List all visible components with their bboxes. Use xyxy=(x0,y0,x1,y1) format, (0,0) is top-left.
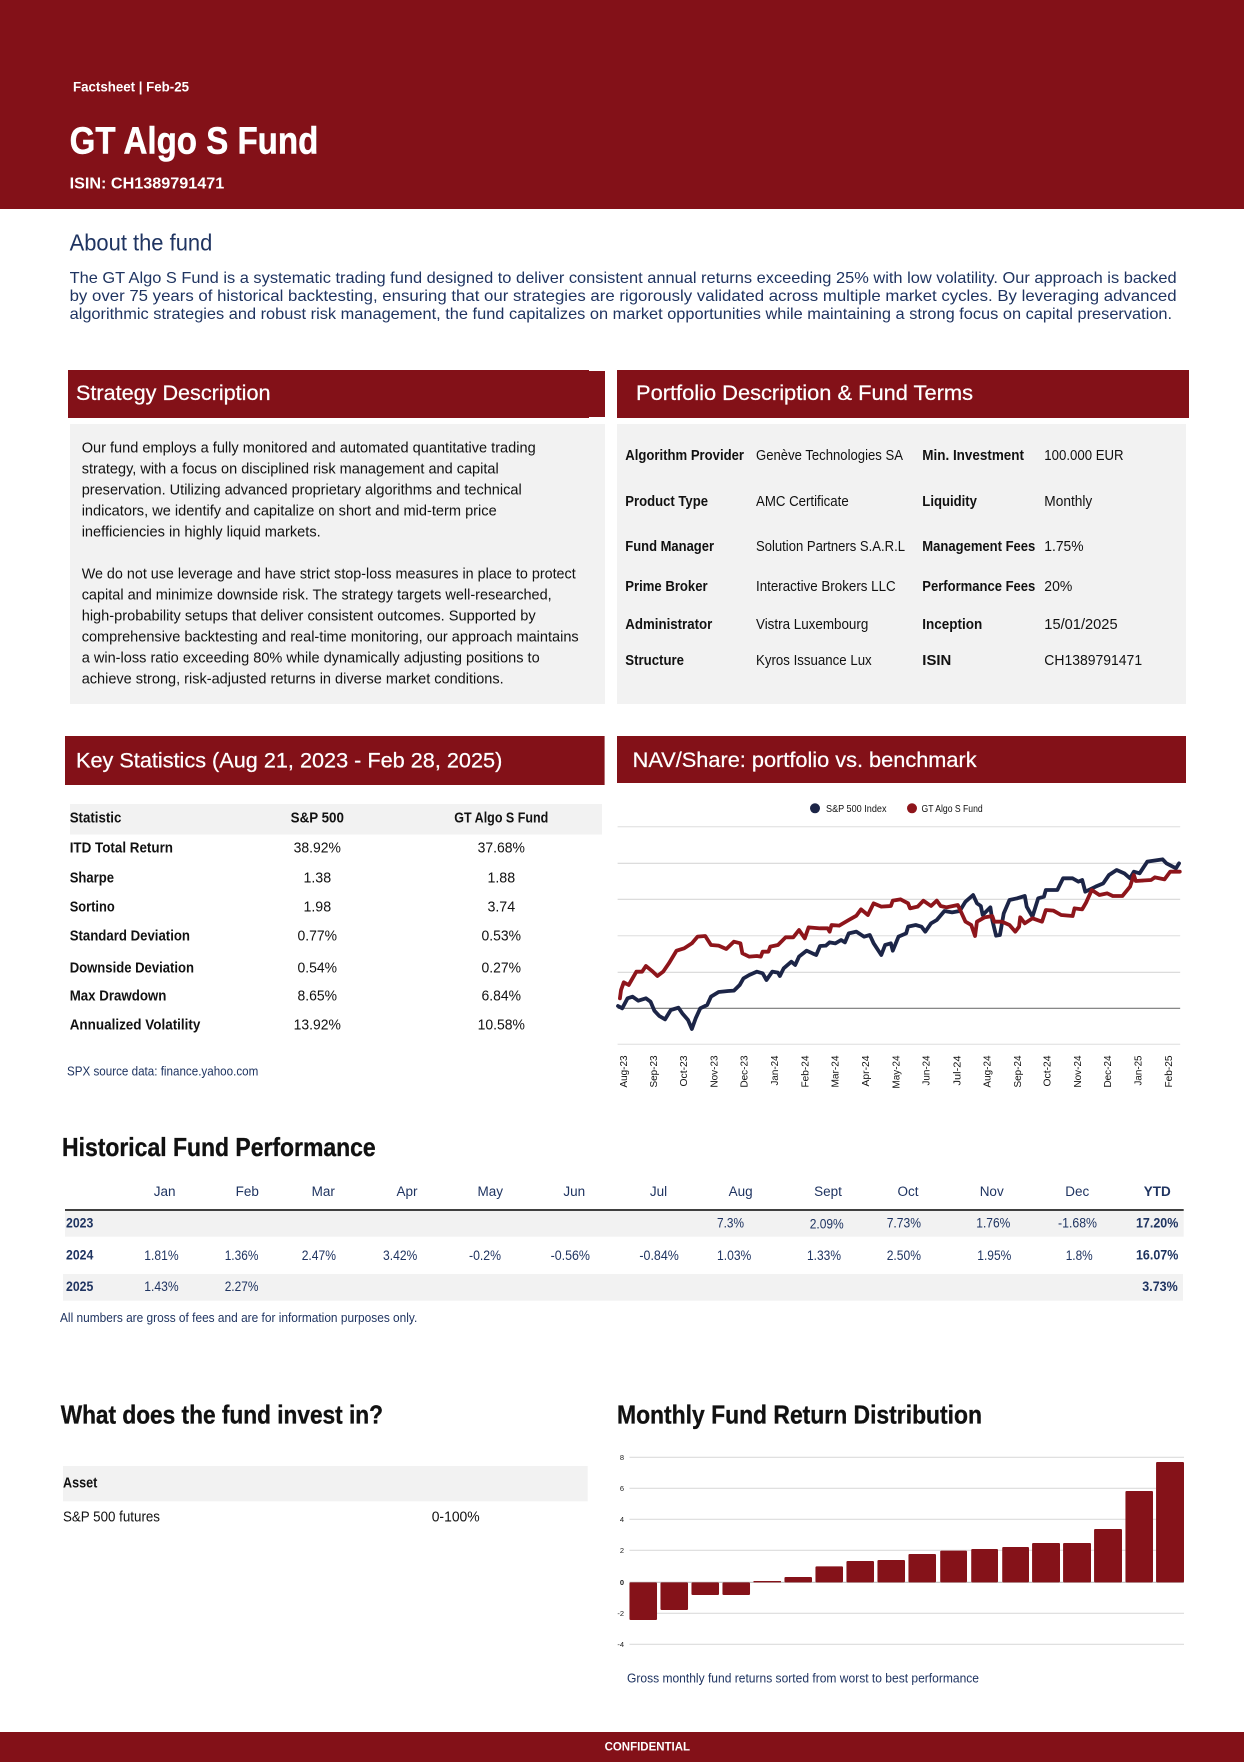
performance table: 1.36% xyxy=(225,1248,258,1263)
fund terms table: Interactive Brokers LLC xyxy=(756,579,896,595)
asset table: 0-100% xyxy=(432,1510,480,1526)
x axis month labels: Oct-23 xyxy=(678,1055,690,1086)
source note: SPX source data: finance.yahoo.com xyxy=(67,1063,258,1078)
panel: strategy description xyxy=(68,370,605,704)
fund terms table: Genève Technologies SA xyxy=(756,448,903,464)
x axis month labels: Oct-24 xyxy=(1042,1055,1054,1086)
performance table: Feb xyxy=(236,1184,259,1199)
x axis month labels: Feb-25 xyxy=(1163,1055,1175,1088)
key statistics table: 37.68% xyxy=(478,841,525,857)
strategy text block: high-probability setups that deliver consistent outcomes. Supported by xyxy=(82,608,536,625)
performance heading: Historical Fund Performance xyxy=(62,1132,376,1162)
x axis month labels: Aug-24 xyxy=(982,1055,994,1088)
key statistics table: ITD Total Return xyxy=(70,841,173,857)
distribution heading: Monthly Fund Return Distribution xyxy=(617,1399,982,1429)
footer bar: CONFIDENTIAL xyxy=(605,1740,690,1754)
fund terms table: CH1389791471 xyxy=(1044,653,1142,669)
x axis month labels: Jul-24 xyxy=(951,1055,963,1086)
key statistics table: 0.53% xyxy=(482,929,521,945)
bar chart xyxy=(629,1457,1184,1644)
strategy text block xyxy=(82,440,579,688)
fund terms table: 1.75% xyxy=(1044,539,1084,555)
y axis labels: 0 xyxy=(620,1578,624,1587)
performance table: -0.84% xyxy=(639,1248,679,1263)
key statistics table: 0.54% xyxy=(298,961,337,977)
performance table: Jul xyxy=(650,1184,667,1199)
fund terms table: Prime Broker xyxy=(625,579,708,595)
x axis month labels xyxy=(618,1055,1175,1088)
performance table: YTD xyxy=(1144,1184,1171,1199)
NAV heading bar xyxy=(617,736,1186,783)
about the fund section xyxy=(70,230,1177,323)
key statistics table: 1.88 xyxy=(487,871,515,887)
y axis labels: 4 xyxy=(620,1515,624,1524)
y axis labels: 6 xyxy=(620,1484,624,1493)
key statistics table: 38.92% xyxy=(294,841,341,857)
y axis labels xyxy=(617,1453,624,1649)
key statistics table: GT Algo S Fund xyxy=(454,811,548,827)
performance table: -0.56% xyxy=(551,1248,590,1263)
strategy text block: inefficiencies in highly liquid markets. xyxy=(82,524,321,541)
about body text xyxy=(70,270,1177,323)
y axis labels: -4 xyxy=(617,1640,624,1649)
line chart xyxy=(618,827,1180,1044)
panel: historical fund performance xyxy=(60,1132,1184,1325)
x axis month labels: Dec-24 xyxy=(1102,1055,1114,1088)
panel: key statistics xyxy=(65,736,605,1078)
key statistics table: 1.38 xyxy=(303,871,331,887)
invest heading: What does the fund invest in? xyxy=(61,1399,383,1429)
performance table: Jun xyxy=(563,1184,585,1199)
performance table: -0.2% xyxy=(469,1248,501,1263)
fund terms table: Vistra Luxembourg xyxy=(756,617,868,633)
asset table xyxy=(63,1476,480,1526)
key statistics table: Max Drawdown xyxy=(70,989,166,1005)
about body text: The GT Algo S Fund is a systematic trading fund designed to deliver consistent annual returns exceeding 25% with low volatility. Our approach is backed xyxy=(70,270,1177,287)
performance table: 1.33% xyxy=(807,1248,841,1263)
performance table xyxy=(66,1184,1178,1294)
about body text: algorithmic strategies and robust risk management, the fund capitalizes on market opportunities while maintaining a strong focus on capital preservation. xyxy=(70,306,1172,323)
performance table: 1.03% xyxy=(717,1248,751,1263)
fund terms table: Fund Manager xyxy=(625,539,714,555)
x axis month labels: May-24 xyxy=(890,1055,902,1088)
key statistics heading bar xyxy=(65,736,605,785)
performance table: 1.8% xyxy=(1066,1248,1093,1263)
fund terms table: Solution Partners S.A.R.L xyxy=(756,539,905,555)
y axis labels: 2 xyxy=(620,1546,624,1555)
strategy heading bar xyxy=(68,370,605,418)
performance table: 1.81% xyxy=(144,1248,179,1263)
GT Algo S Fund line xyxy=(620,872,1180,998)
performance table: Sept xyxy=(814,1184,842,1199)
about heading: About the fund xyxy=(70,230,212,256)
key statistics table xyxy=(70,811,548,1033)
key statistics heading bar: Key Statistics (Aug 21, 2023 - Feb 28, 2025) xyxy=(76,749,502,773)
key statistics table: 1.98 xyxy=(303,900,331,916)
performance footnote: All numbers are gross of fees and are for information purposes only. xyxy=(60,1310,417,1325)
asset table: Asset xyxy=(63,1476,97,1492)
fund terms table: Algorithm Provider xyxy=(625,448,744,464)
strategy text block: achieve strong, risk-adjusted returns in diverse market conditions. xyxy=(82,671,504,688)
strategy text block: strategy, with a focus on disciplined risk management and capital xyxy=(82,461,499,478)
fund terms table: Performance Fees xyxy=(922,579,1035,595)
key statistics table: 3.74 xyxy=(487,900,515,916)
performance table: 2025 xyxy=(66,1279,94,1294)
fund terms table: Liquidity xyxy=(922,494,977,510)
fund terms table: Administrator xyxy=(625,617,713,633)
performance table: -1.68% xyxy=(1058,1215,1097,1230)
fund terms table: Inception xyxy=(922,617,982,633)
portfolio heading bar xyxy=(617,370,1189,418)
strategy text block: a win-loss ratio exceeding 80% while dynamically adjusting positions to xyxy=(82,650,540,667)
x axis month labels: Mar-24 xyxy=(830,1055,842,1088)
strategy text block: comprehensive backtesting and real-time monitoring, our approach maintains xyxy=(82,629,579,646)
x axis month labels: Feb-24 xyxy=(799,1055,811,1088)
performance table: Oct xyxy=(897,1184,919,1199)
fund terms table: 100.000 EUR xyxy=(1044,448,1124,464)
chart legend: S&P 500 Index xyxy=(826,803,887,815)
x axis month labels: Dec-23 xyxy=(738,1055,750,1088)
performance table: 2.27% xyxy=(225,1279,258,1294)
key statistics table: Downside Deviation xyxy=(70,961,194,977)
fund terms table: 15/01/2025 xyxy=(1044,617,1118,633)
title: GT Algo S Fund xyxy=(70,120,318,162)
key statistics table: S&P 500 xyxy=(291,811,344,827)
portfolio heading bar: Portfolio Description & Fund Terms xyxy=(636,381,973,405)
panel: what does the fund invest in xyxy=(61,1399,588,1526)
performance table: 7.3% xyxy=(717,1215,744,1230)
key statistics table: Statistic xyxy=(70,811,121,827)
strategy text block: preservation. Utilizing advanced proprietary algorithms and technical xyxy=(82,482,522,499)
fund terms table: Monthly xyxy=(1044,494,1093,510)
performance table: Apr xyxy=(396,1184,418,1199)
x axis month labels: Aug-23 xyxy=(618,1055,630,1088)
key statistics table: Sortino xyxy=(70,900,115,916)
x axis month labels: Nov-23 xyxy=(708,1055,720,1088)
strategy text block: We do not use leverage and have strict stop-loss measures in place to protect xyxy=(82,566,576,583)
performance table: Dec xyxy=(1065,1184,1090,1199)
key statistics table: 13.92% xyxy=(294,1017,341,1033)
performance table: Mar xyxy=(312,1184,335,1199)
NAV heading bar: NAV/Share: portfolio vs. benchmark xyxy=(633,748,977,772)
chart legend: GT Algo S Fund xyxy=(922,803,983,815)
performance table: 17.20% xyxy=(1136,1215,1178,1230)
key statistics table: Standard Deviation xyxy=(70,929,190,945)
performance table: May xyxy=(478,1184,503,1199)
key statistics table: 0.27% xyxy=(482,961,521,977)
performance table: 3.73% xyxy=(1142,1279,1178,1294)
fund terms table: AMC Certificate xyxy=(756,494,849,510)
performance table: 1.95% xyxy=(977,1248,1011,1263)
key statistics table: 6.84% xyxy=(482,989,521,1005)
S&P 500 line xyxy=(618,859,1179,1029)
performance table: 1.43% xyxy=(144,1279,179,1294)
fund terms table: Product Type xyxy=(625,494,708,510)
performance table: 2024 xyxy=(66,1247,94,1262)
strategy text block: Our fund employs a fully monitored and automated quantitative trading xyxy=(82,440,536,457)
x axis month labels: Apr-24 xyxy=(860,1055,872,1086)
fund terms table xyxy=(625,448,1142,669)
footer bar xyxy=(0,1732,1244,1762)
strategy text block: indicators, we identify and capitalize on short and mid-term price xyxy=(82,503,497,520)
page header banner xyxy=(0,0,1244,209)
fund terms table: Structure xyxy=(625,653,684,669)
performance table: 2.09% xyxy=(810,1216,844,1232)
performance table: 2.47% xyxy=(302,1248,336,1263)
strategy heading bar: Strategy Description xyxy=(76,381,270,405)
x axis month labels: Jan-25 xyxy=(1133,1055,1145,1086)
fund terms table: 20% xyxy=(1044,579,1072,595)
strategy text block: capital and minimize downside risk. The strategy targets well-researched, xyxy=(82,587,552,604)
x axis month labels: Nov-24 xyxy=(1072,1055,1084,1088)
chart legend xyxy=(810,803,983,815)
performance table: Nov xyxy=(980,1184,1004,1199)
x axis month labels: Sep-24 xyxy=(1012,1055,1024,1088)
panel: portfolio description and fund terms xyxy=(617,370,1189,704)
factsheet date label: Factsheet | Feb-25 xyxy=(73,80,189,94)
fund terms table: ISIN xyxy=(922,653,951,669)
key statistics table: Sharpe xyxy=(70,871,114,887)
fund terms table: Kyros Issuance Lux xyxy=(756,653,872,669)
y axis labels: -2 xyxy=(617,1609,624,1618)
key statistics table: Annualized Volatility xyxy=(70,1017,200,1033)
performance table: Aug xyxy=(729,1184,753,1199)
performance table: 1.76% xyxy=(976,1215,1010,1230)
performance table: 2.50% xyxy=(887,1248,921,1263)
performance table: 16.07% xyxy=(1136,1247,1178,1262)
x axis month labels: Jun-24 xyxy=(921,1055,933,1086)
key statistics table: 10.58% xyxy=(478,1017,525,1033)
ISIN subtitle: ISIN: CH1389791471 xyxy=(70,176,224,193)
panel: monthly fund return distribution xyxy=(617,1399,1184,1686)
chart caption: Gross monthly fund returns sorted from worst to best performance xyxy=(627,1671,979,1686)
x axis month labels: Jan-24 xyxy=(769,1055,781,1086)
performance table: 2023 xyxy=(66,1215,94,1230)
fund terms table: Min. Investment xyxy=(922,448,1024,464)
y axis labels: 8 xyxy=(620,1453,624,1462)
performance table: 3.42% xyxy=(383,1248,417,1263)
key statistics table: 8.65% xyxy=(298,989,337,1005)
performance table: Jan xyxy=(154,1184,176,1199)
asset table: S&P 500 futures xyxy=(63,1510,160,1526)
key statistics table: 0.77% xyxy=(298,929,337,945)
performance table: 7.73% xyxy=(887,1215,921,1230)
fund terms table: Management Fees xyxy=(922,539,1035,555)
panel: NAV chart xyxy=(617,736,1186,1088)
x axis month labels: Sep-23 xyxy=(648,1055,660,1088)
about body text: by over 75 years of historical backtesting, ensuring that our strategies are rigorously validated across multiple market cycles. By leveraging advanced xyxy=(70,288,1177,305)
